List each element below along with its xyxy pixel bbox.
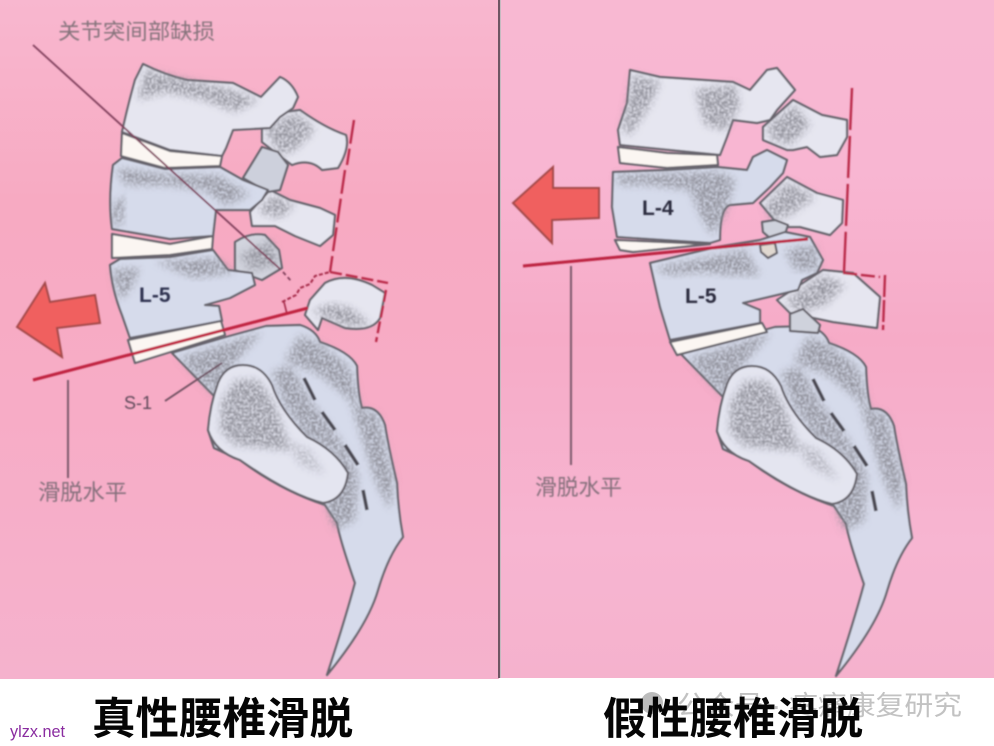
panel: true spondylolisthesis figure — [17, 45, 403, 675]
slip level leader — [570, 266, 572, 465]
L5 body — [110, 250, 255, 338]
arrow: forward slip left — [17, 283, 100, 357]
detached posterior arch — [305, 278, 385, 330]
label: pars defect: 关节突间部缺损 — [58, 20, 215, 44]
dashed alignment lines — [282, 120, 388, 342]
source mark: ylzx.net — [10, 722, 65, 741]
L4 body — [612, 150, 787, 243]
label: L-5 left: L-5 — [139, 284, 171, 307]
L5 spinous process — [777, 270, 880, 328]
L3 spinous process — [763, 100, 847, 157]
L4 inferior facet — [762, 220, 788, 238]
disc L3-L4 — [121, 133, 222, 168]
L4 inferior disc — [615, 240, 710, 252]
small articular facet on slip line — [760, 243, 777, 258]
arrow: forward slip right — [513, 167, 599, 243]
label: slip level right: 滑脱水平 — [535, 475, 622, 500]
middle vertebra body — [110, 158, 268, 239]
S-1 leader — [165, 363, 222, 401]
slip level leader — [67, 380, 69, 478]
panel: false spondylolisthesis background — [501, 0, 994, 678]
panel: true spondylolisthesis background — [0, 0, 499, 679]
L4 spinous process — [760, 177, 843, 235]
panel: false spondylolisthesis figure — [513, 68, 912, 676]
label: slip level left: 滑脱水平 — [38, 480, 127, 505]
L5 lower facet — [790, 309, 820, 333]
slip level line — [523, 239, 808, 266]
dashed alignment lines — [843, 88, 885, 330]
middle vertebra spinous process — [250, 190, 335, 246]
L3 body — [618, 68, 795, 155]
upper vertebra body — [122, 64, 298, 156]
title: true spondylolisthesis: 真性腰椎滑脱 — [92, 696, 353, 744]
pars defect line — [33, 45, 280, 269]
inferior articular process — [235, 234, 282, 280]
disc L4-L5 — [112, 234, 213, 258]
label: S-1: S-1 — [124, 393, 152, 413]
label: L-5 right: L-5 — [685, 285, 717, 308]
panel divider — [498, 0, 500, 678]
disc L5-S1 — [128, 321, 225, 363]
slip level line — [33, 308, 308, 380]
L5 body — [650, 232, 823, 340]
title: false spondylolisthesis: 假性腰椎滑脱 — [603, 696, 863, 744]
upper vertebra spinous process — [262, 110, 347, 170]
sacrum with ilium surface — [172, 325, 403, 675]
articular facet — [243, 147, 288, 192]
sacrum with ilium surface — [681, 326, 912, 676]
watermark: 公众号 · 疼痛康复研究 — [677, 691, 962, 721]
disc L5-S1 — [670, 323, 767, 355]
disc L3-L4 — [618, 147, 718, 168]
label: L-4: L-4 — [642, 197, 674, 220]
